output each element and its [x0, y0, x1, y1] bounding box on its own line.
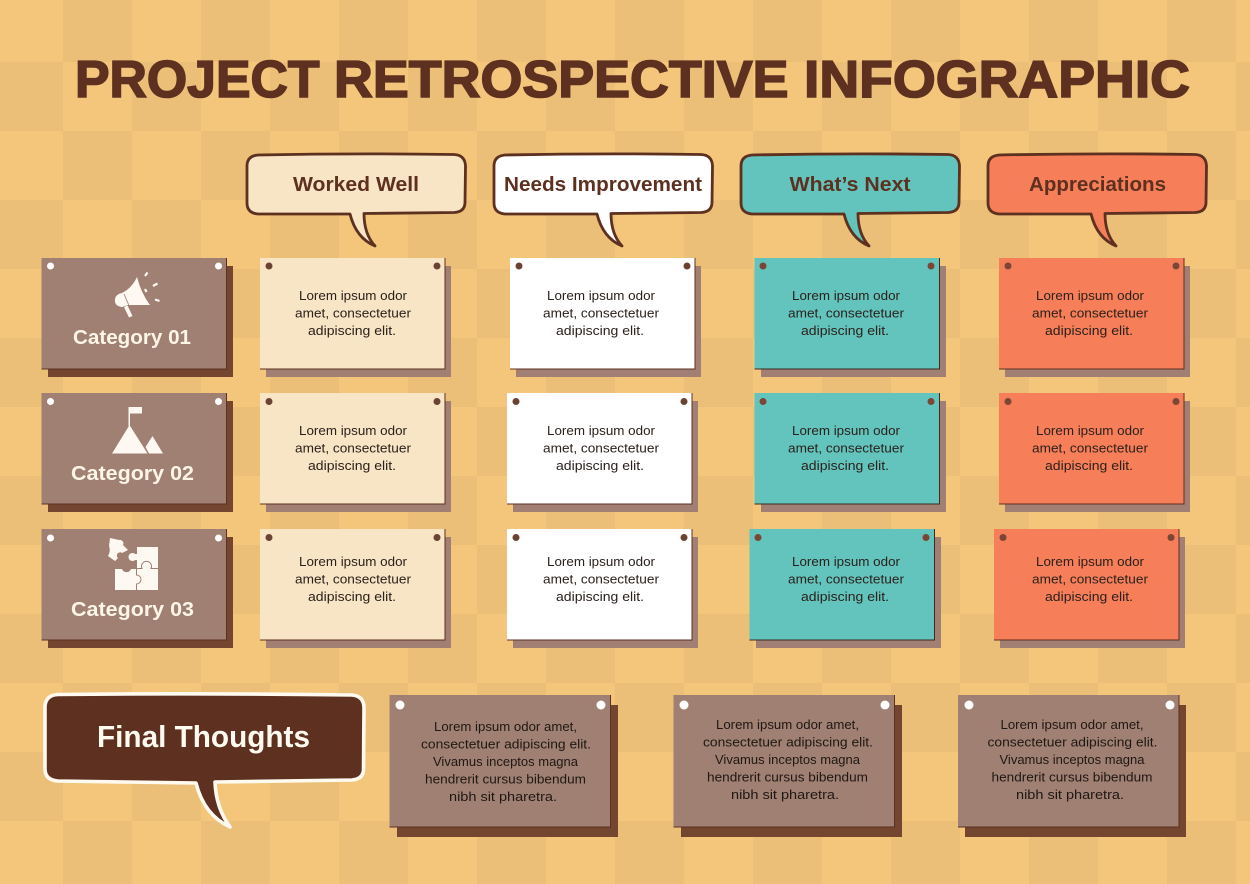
card: Needs Improvement row 1: amet, consectetuer — [543, 306, 659, 320]
card: Needs Improvement row 2: Lorem ipsum odor — [547, 424, 655, 438]
card: Worked Well row 2: amet, consectetuer — [295, 442, 411, 456]
icon: megaphone — [115, 272, 160, 318]
card: Worked Well row 2 — [260, 393, 451, 512]
title — [75, 51, 1190, 109]
final thoughts card 2 — [674, 695, 902, 837]
final thoughts card 3: consectetuer adipiscing elit. — [988, 736, 1158, 750]
speech bubble: What's Next — [741, 154, 960, 246]
title: PROJECT — [75, 51, 320, 109]
final thoughts card 1 — [390, 695, 618, 837]
card: What's Next row 2: Lorem ipsum odor — [792, 424, 900, 438]
category card 02: Category 02 — [71, 462, 194, 485]
card: What's Next row 2 — [754, 393, 946, 512]
card: Worked Well row 3: adipiscing elit. — [308, 590, 396, 604]
final thoughts card 3: hendrerit cursus bibendum — [992, 770, 1152, 784]
card: Worked Well row 2: Lorem ipsum odor — [299, 424, 407, 438]
card: Needs Improvement row 1 — [510, 258, 701, 377]
final thoughts card 2: Vivamus inceptos magna — [715, 753, 860, 767]
category card 01 — [42, 258, 233, 377]
card: Worked Well row 1: Lorem ipsum odor — [299, 289, 407, 303]
category card 03: Category 03 — [71, 598, 194, 621]
card: Appreciations row 3: adipiscing elit. — [1045, 590, 1133, 604]
speech bubble: Appreciations: Appreciations — [1029, 173, 1166, 196]
final thoughts card 2: consectetuer adipiscing elit. — [703, 736, 873, 750]
category card 01: Category 01 — [73, 326, 191, 349]
card: What's Next row 3: Lorem ipsum odor — [792, 555, 900, 569]
category card 03 — [42, 529, 233, 648]
final thoughts card 1: Vivamus inceptos magna — [433, 755, 578, 769]
card: What's Next row 3: amet, consectetuer — [788, 572, 904, 586]
card: Appreciations row 2 — [999, 393, 1190, 512]
card: What's Next row 3 — [750, 529, 941, 648]
speech bubble: Worked Well: Worked Well — [293, 173, 419, 196]
card: Appreciations row 1: Lorem ipsum odor — [1036, 289, 1144, 303]
card: Worked Well row 3: amet, consectetuer — [295, 572, 411, 586]
card: What's Next row 1: Lorem ipsum odor — [792, 289, 900, 303]
title: RETROSPECTIVE — [334, 51, 788, 109]
speech bubble: Needs Improvement: Needs Improvement — [504, 173, 702, 196]
title: INFOGRAPHIC — [804, 51, 1190, 109]
card: Worked Well row 2: adipiscing elit. — [308, 459, 396, 473]
card: Worked Well row 1: amet, consectetuer — [295, 306, 411, 320]
card: Appreciations row 1 — [999, 258, 1190, 377]
card: What's Next row 3: adipiscing elit. — [801, 590, 889, 604]
card: Needs Improvement row 2: adipiscing elit. — [556, 459, 644, 473]
final thoughts card 3: Vivamus inceptos magna — [1000, 753, 1145, 767]
card: What's Next row 1: adipiscing elit. — [801, 324, 889, 338]
speech bubble: Needs Improvement — [494, 154, 712, 246]
card: Appreciations row 3: Lorem ipsum odor — [1036, 555, 1144, 569]
icon: puzzle pieces — [108, 538, 158, 590]
card: Needs Improvement row 1: Lorem ipsum odor — [547, 289, 655, 303]
card: What's Next row 1: amet, consectetuer — [788, 306, 904, 320]
card: What's Next row 2: amet, consectetuer — [788, 442, 904, 456]
speech bubble: Final Thoughts — [45, 694, 364, 827]
final thoughts card 3: Lorem ipsum odor amet, — [1000, 718, 1144, 732]
card: Appreciations row 3: amet, consectetuer — [1032, 572, 1148, 586]
card: Needs Improvement row 3: amet, consectetuer — [543, 572, 659, 586]
card: Worked Well row 1 — [260, 258, 451, 377]
icon: mountain with flag — [112, 407, 163, 454]
card: Appreciations row 3 — [994, 529, 1185, 648]
speech bubble: Worked Well — [247, 154, 466, 246]
card: What's Next row 1 — [754, 258, 946, 377]
final thoughts card 2: nibh sit pharetra. — [731, 788, 839, 802]
card: Appreciations row 2: amet, consectetuer — [1032, 442, 1148, 456]
card: What's Next row 2: adipiscing elit. — [801, 459, 889, 473]
card: Needs Improvement row 1: adipiscing elit. — [556, 324, 644, 338]
speech bubble: Appreciations — [988, 154, 1206, 246]
final thoughts card 3 — [958, 695, 1186, 837]
card: Needs Improvement row 3: adipiscing elit. — [556, 590, 644, 604]
final thoughts card 2: Lorem ipsum odor amet, — [716, 718, 859, 732]
card: Appreciations row 1: adipiscing elit. — [1045, 324, 1133, 338]
card: Appreciations row 2: adipiscing elit. — [1045, 459, 1133, 473]
final thoughts card 3: nibh sit pharetra. — [1016, 788, 1124, 802]
card: Needs Improvement row 2 — [507, 393, 698, 512]
card: Appreciations row 2: Lorem ipsum odor — [1036, 424, 1144, 438]
final thoughts card 1: consectetuer adipiscing elit. — [421, 738, 591, 752]
card: Appreciations row 1: amet, consectetuer — [1032, 306, 1148, 320]
card: Needs Improvement row 3 — [507, 529, 698, 648]
final thoughts card 1: hendrerit cursus bibendum — [425, 772, 586, 786]
category card 02 — [42, 393, 233, 512]
card: Worked Well row 3: Lorem ipsum odor — [299, 555, 407, 569]
final thoughts card 2: hendrerit cursus bibendum — [707, 770, 868, 784]
speech bubble: Final Thoughts: Final Thoughts — [97, 719, 310, 754]
card: Worked Well row 1: adipiscing elit. — [308, 324, 396, 338]
card: Needs Improvement row 2: amet, consectetuer — [543, 442, 659, 456]
card: Worked Well row 3 — [260, 529, 451, 648]
card: Needs Improvement row 3: Lorem ipsum odor — [547, 555, 655, 569]
speech bubble: What's Next: What’s Next — [790, 173, 911, 196]
final thoughts card 1: Lorem ipsum odor amet, — [434, 720, 577, 734]
final thoughts card 1: nibh sit pharetra. — [449, 790, 557, 804]
